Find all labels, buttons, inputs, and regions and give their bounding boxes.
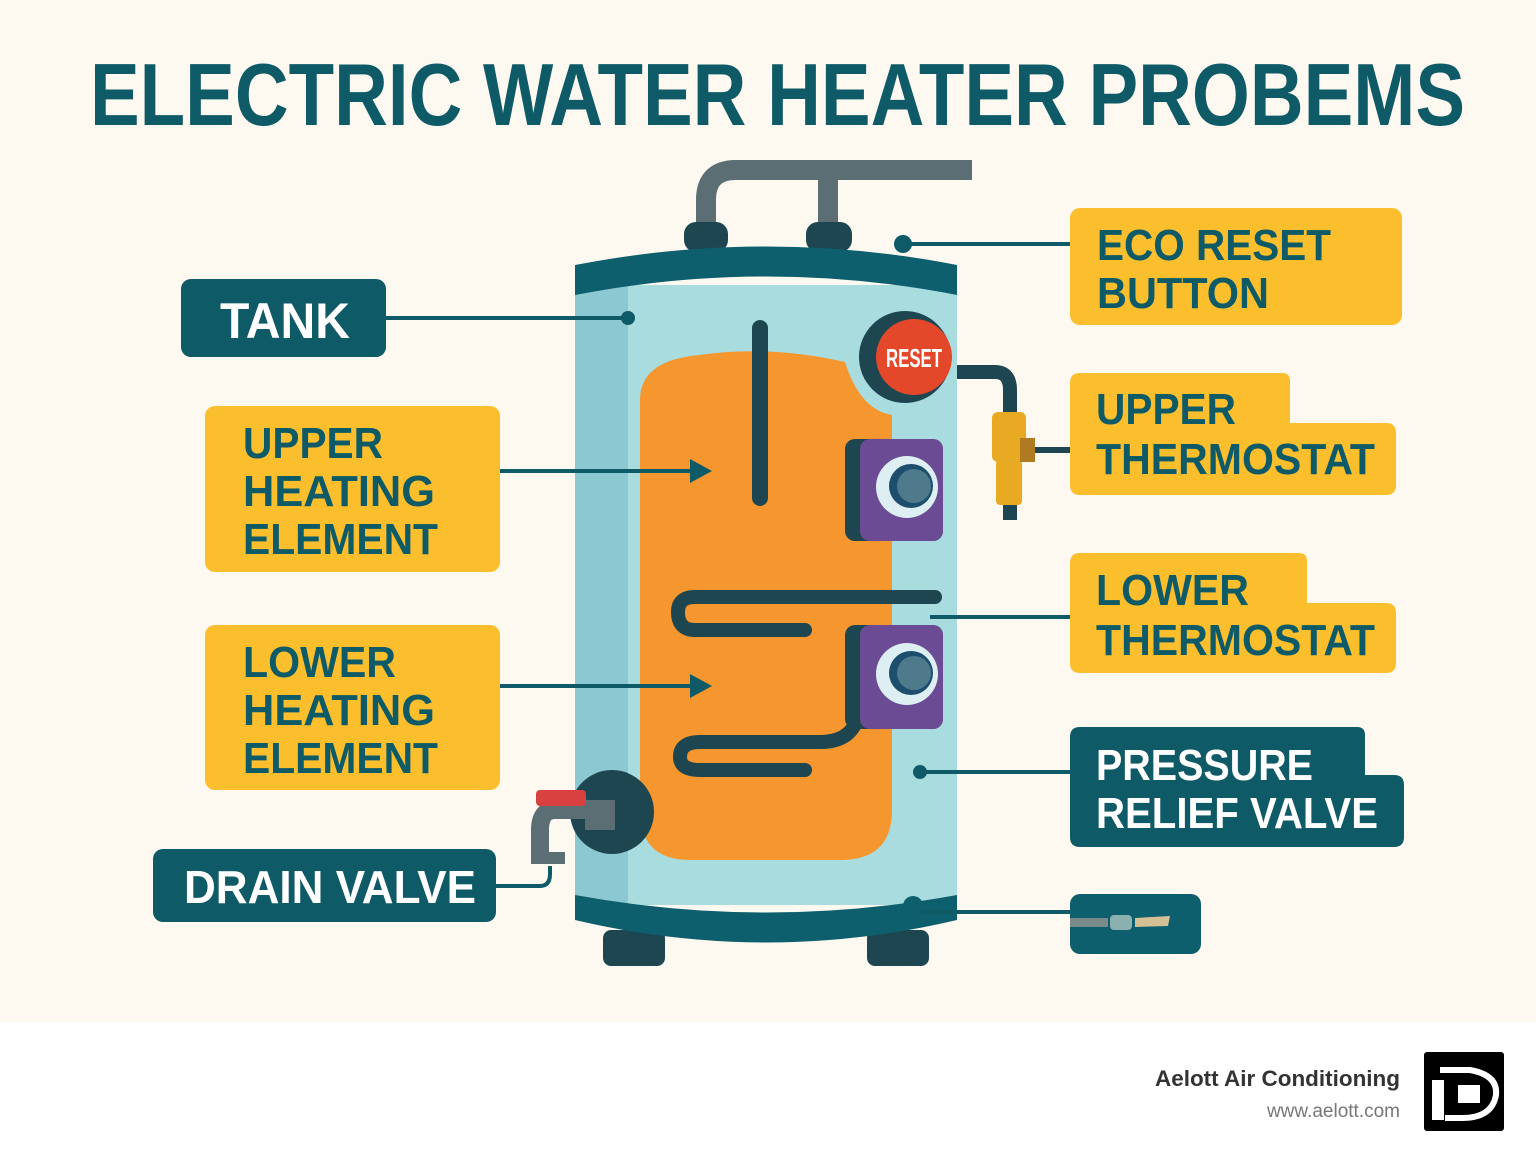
label: upper thermostat: UPPER [1096,385,1236,434]
label: pressure relief valve: RELIEF VALVE [1096,789,1378,838]
label: pressure relief valve [913,727,1404,847]
label: upper thermostat: THERMOSTAT [1096,435,1375,484]
label: small unlabeled box [903,894,1201,954]
label: eco reset button [894,208,1402,325]
water heater tank [531,170,1035,966]
label: tank [181,279,635,357]
pipes [706,170,972,232]
label: upper heating element: ELEMENT [243,515,438,564]
label: lower heating element [205,625,712,790]
orange water [640,351,892,860]
water heater tank: RESET [886,343,942,373]
label: upper thermostat [1035,373,1396,495]
upper thermostat [845,439,943,541]
upper element rod [752,320,768,506]
label: upper heating element: UPPER [243,419,383,468]
label: lower thermostat: LOWER [1096,566,1249,615]
footer brand text [1155,1066,1400,1122]
feet [603,930,665,966]
label: drain valve [153,849,550,922]
footer brand text: www.aelott.com [1266,1101,1400,1122]
label: lower heating element: HEATING [243,686,435,735]
reset button [859,311,951,403]
label: eco reset button: BUTTON [1097,269,1269,318]
label: tank: TANK [220,293,350,349]
lower element coil [678,597,935,770]
drain valve [570,770,654,854]
lower thermostat [845,625,943,729]
label: lower heating element: ELEMENT [243,734,438,783]
label: upper heating element: HEATING [243,467,435,516]
label: upper heating element [205,406,712,572]
label: lower thermostat [930,553,1396,673]
label: eco reset button: ECO RESET [1097,221,1331,270]
label: lower thermostat: THERMOSTAT [1096,616,1375,665]
label: drain valve: DRAIN VALVE [184,861,476,913]
label: lower heating element: LOWER [243,638,396,687]
label: pressure relief valve: PRESSURE [1096,741,1313,790]
footer logo [1424,1052,1504,1131]
body [575,285,957,905]
pressure relief pipe [957,372,1010,520]
footer brand text: Aelott Air Conditioning [1155,1066,1400,1091]
